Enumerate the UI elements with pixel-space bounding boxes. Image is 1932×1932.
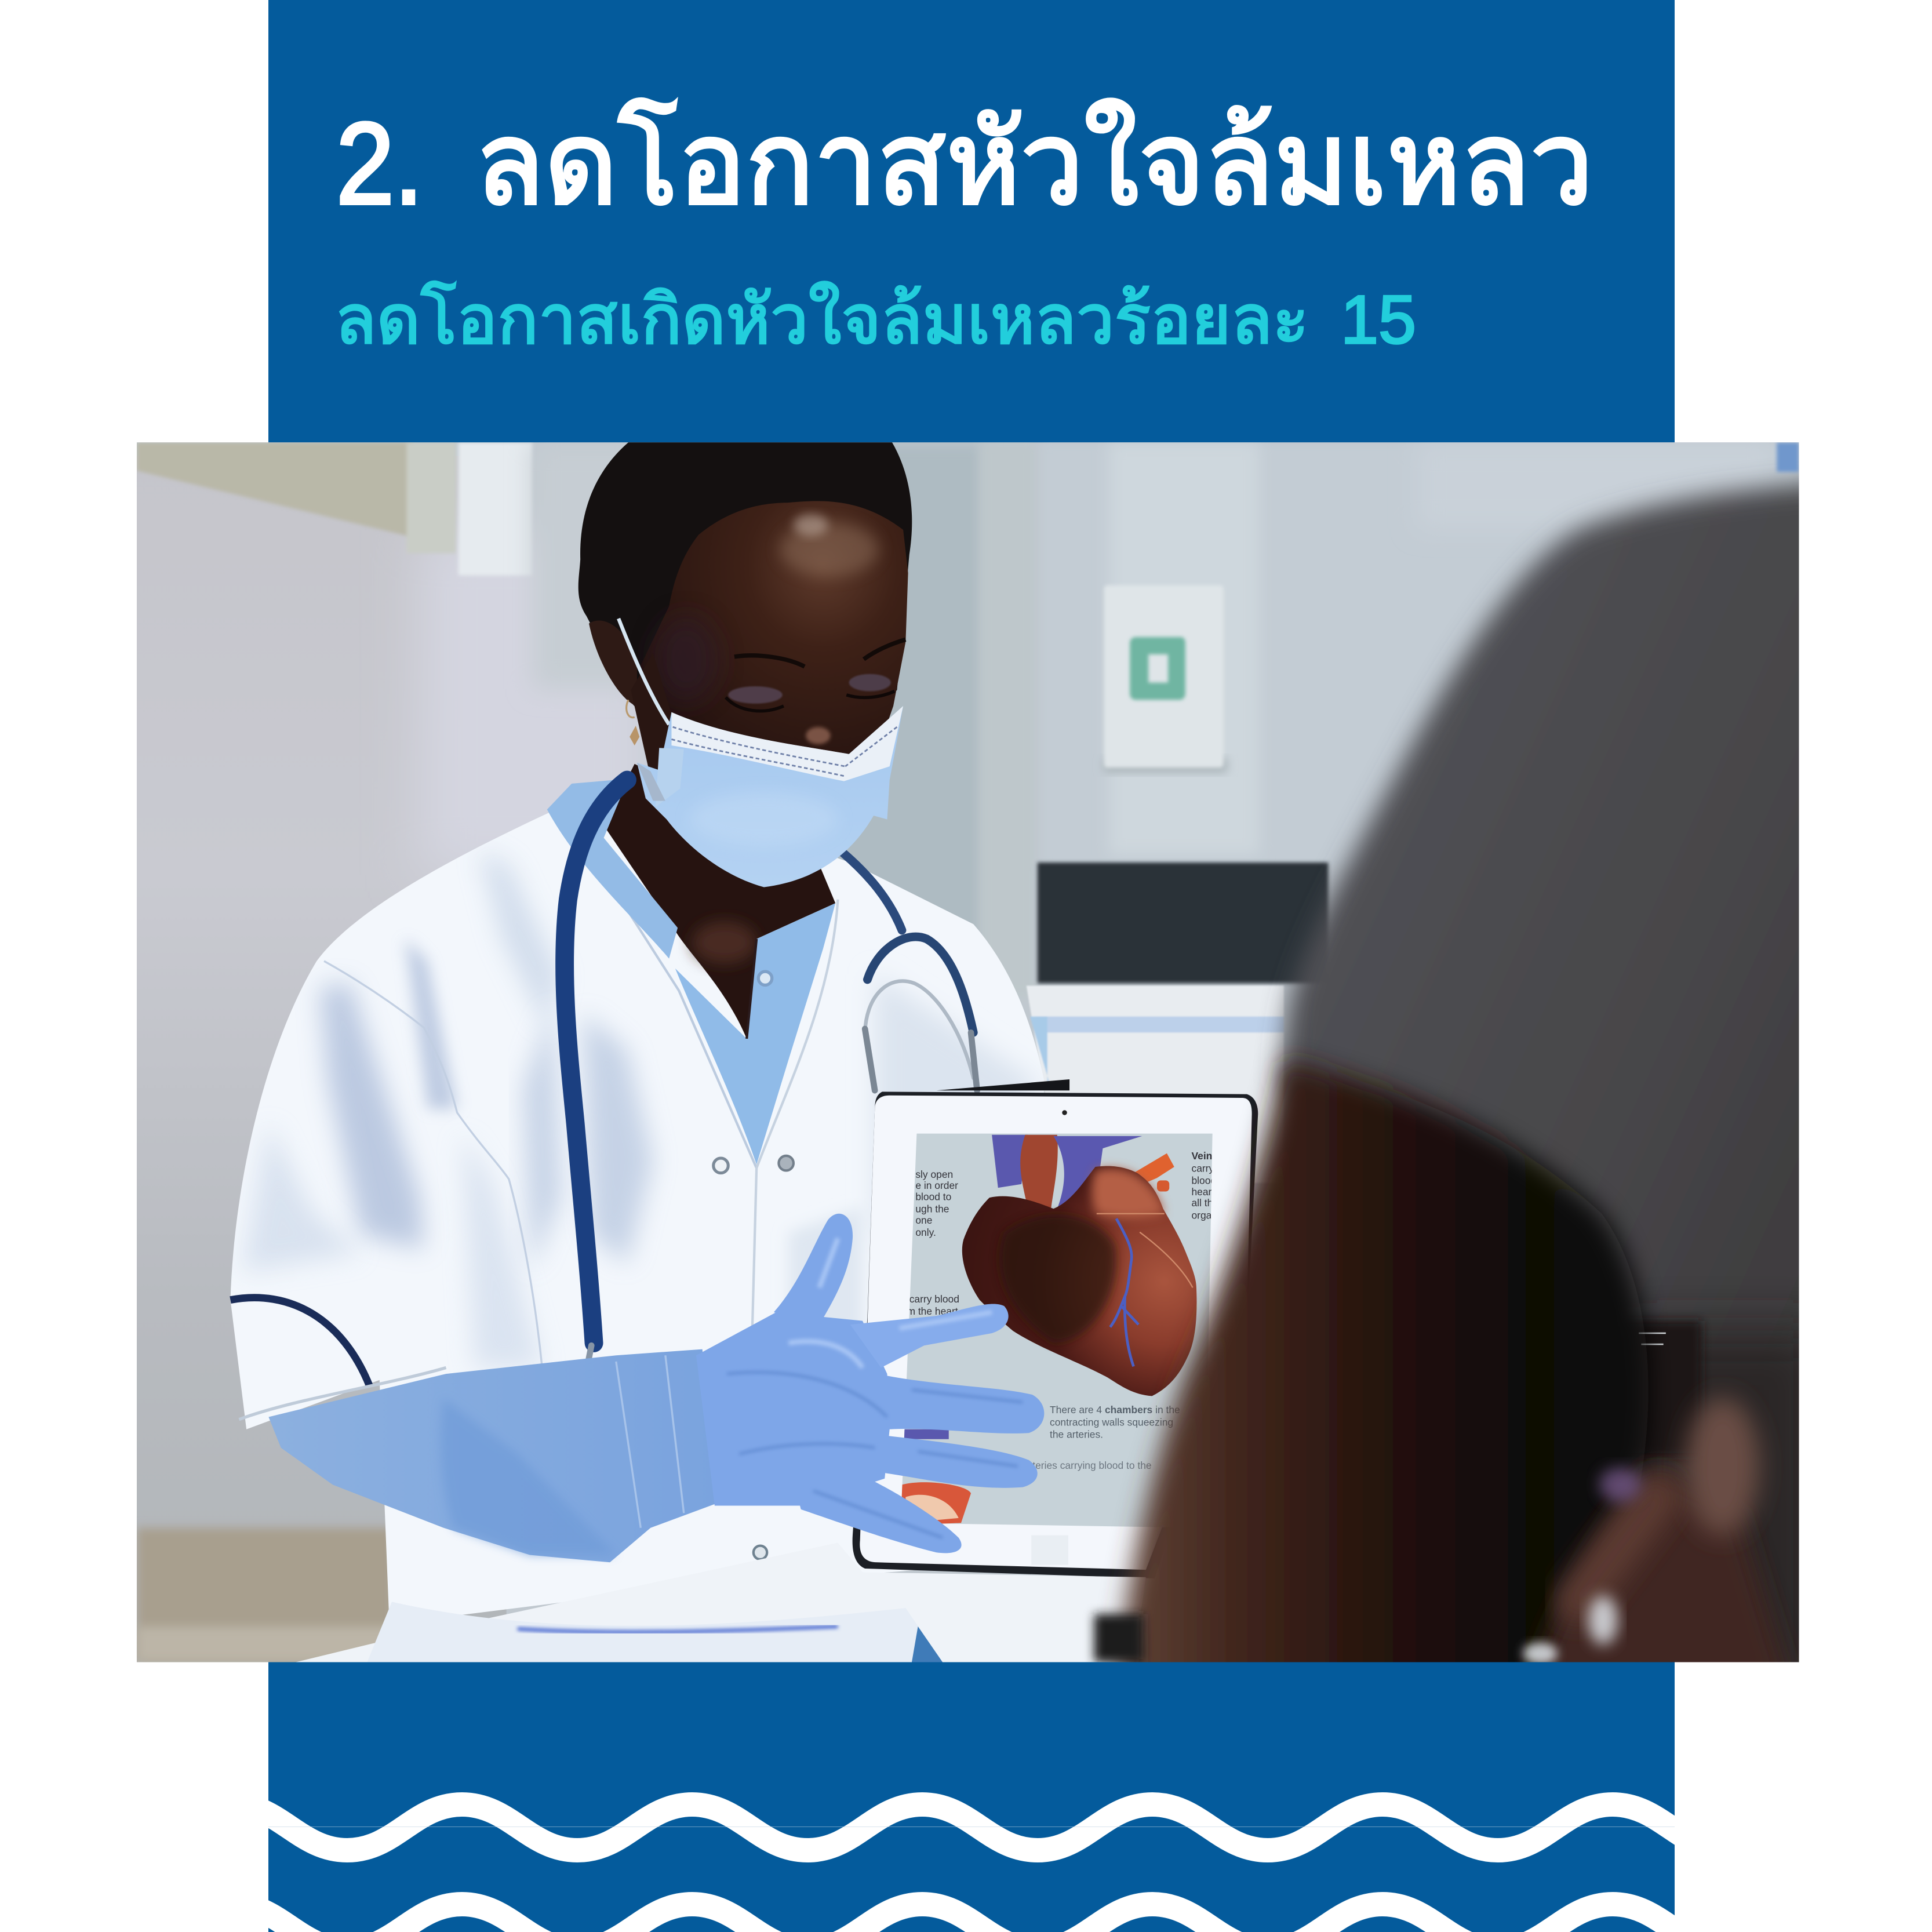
tablet screen text: the arteries. [1050,1429,1103,1440]
panel: header [268,0,1675,443]
glove middle finger [877,1374,1044,1433]
forearm sleeve [268,1349,717,1562]
desk [296,1542,1146,1662]
bottle [1620,1321,1702,1457]
lab coat [230,788,1045,1624]
tablet screen text: ugh the [915,1203,949,1215]
tablet screen text: Vein [1191,1150,1212,1162]
tablet screen text: contracting walls squeezing [1050,1416,1173,1428]
mask ear loop [618,618,669,725]
tablet screen text [907,1150,1216,1471]
device: tablet [853,1079,1258,1578]
subtitle: 15 [1341,282,1416,358]
dark cabinet [1038,863,1328,983]
coat lapel [594,857,756,1168]
title: ลดโอกาสหัวใจล้มเหลว [475,99,1593,228]
title: 2. [336,99,423,228]
tablet screen text: There are 4 chambers in the [1050,1404,1180,1416]
dark object on desk [1094,1614,1144,1662]
nose highlight [806,727,831,744]
head [578,442,912,795]
hand [1523,1397,1793,1688]
tablet screen text: hear [1191,1186,1212,1198]
subtitle: ลดโอกาสเกิดหัวใจล้มเหลวร้อยละ [335,282,1309,358]
glove palm [696,1312,890,1506]
tablet screen [901,1134,1213,1528]
tablet screen text: m the heart [907,1305,958,1317]
glove index finger [850,1304,1009,1367]
neck and chest [604,764,835,1039]
grey shirt [1283,483,1848,1725]
surgical mask [637,706,903,887]
blue shirt collar [547,778,835,1165]
tablet screen text: e in order [915,1180,958,1191]
wall sign with green cross [1104,585,1227,773]
eyebrows [734,656,805,667]
tablet screen text: orga [1191,1209,1212,1221]
wave pattern [232,1804,1728,1932]
glove little finger [795,1479,962,1553]
tablet screen text: carry blood [909,1293,959,1305]
tablet screen text: blood [1191,1175,1216,1187]
blue sleeve and glove [268,1214,1044,1562]
figure: doctor [230,442,1045,1624]
tablet screen text: sly open [915,1169,953,1180]
glove thumb [774,1214,853,1325]
office background [137,442,1799,1662]
glove ring finger [881,1435,1038,1488]
tablet screen text: one [915,1214,932,1226]
photo: doctor showing a heart on a tablet [137,442,1848,1725]
tablet screen text: only. [915,1227,936,1238]
sleeve trim [230,1298,370,1386]
top right corner accent [1777,442,1799,472]
figure: blurred patient in foreground [1094,483,1848,1725]
white monitor [1027,986,1284,1183]
eyes [728,686,783,704]
panel: footer with waves [232,1662,1728,1932]
heart model [962,1135,1197,1396]
tablet screen text: blood to [915,1191,951,1202]
tablet screen text: carry [1191,1162,1214,1174]
coat fold shadows [243,850,1041,1367]
earring [627,700,635,718]
stethoscope [565,780,977,1370]
coat buttons [714,1156,794,1559]
tablet screen text: all th [1191,1197,1213,1209]
dark lower right area [1627,1331,1824,1700]
papers on the desk [367,1602,943,1662]
tablet screen text: teries carrying blood to the [1032,1460,1152,1471]
arm [1115,1060,1649,1700]
